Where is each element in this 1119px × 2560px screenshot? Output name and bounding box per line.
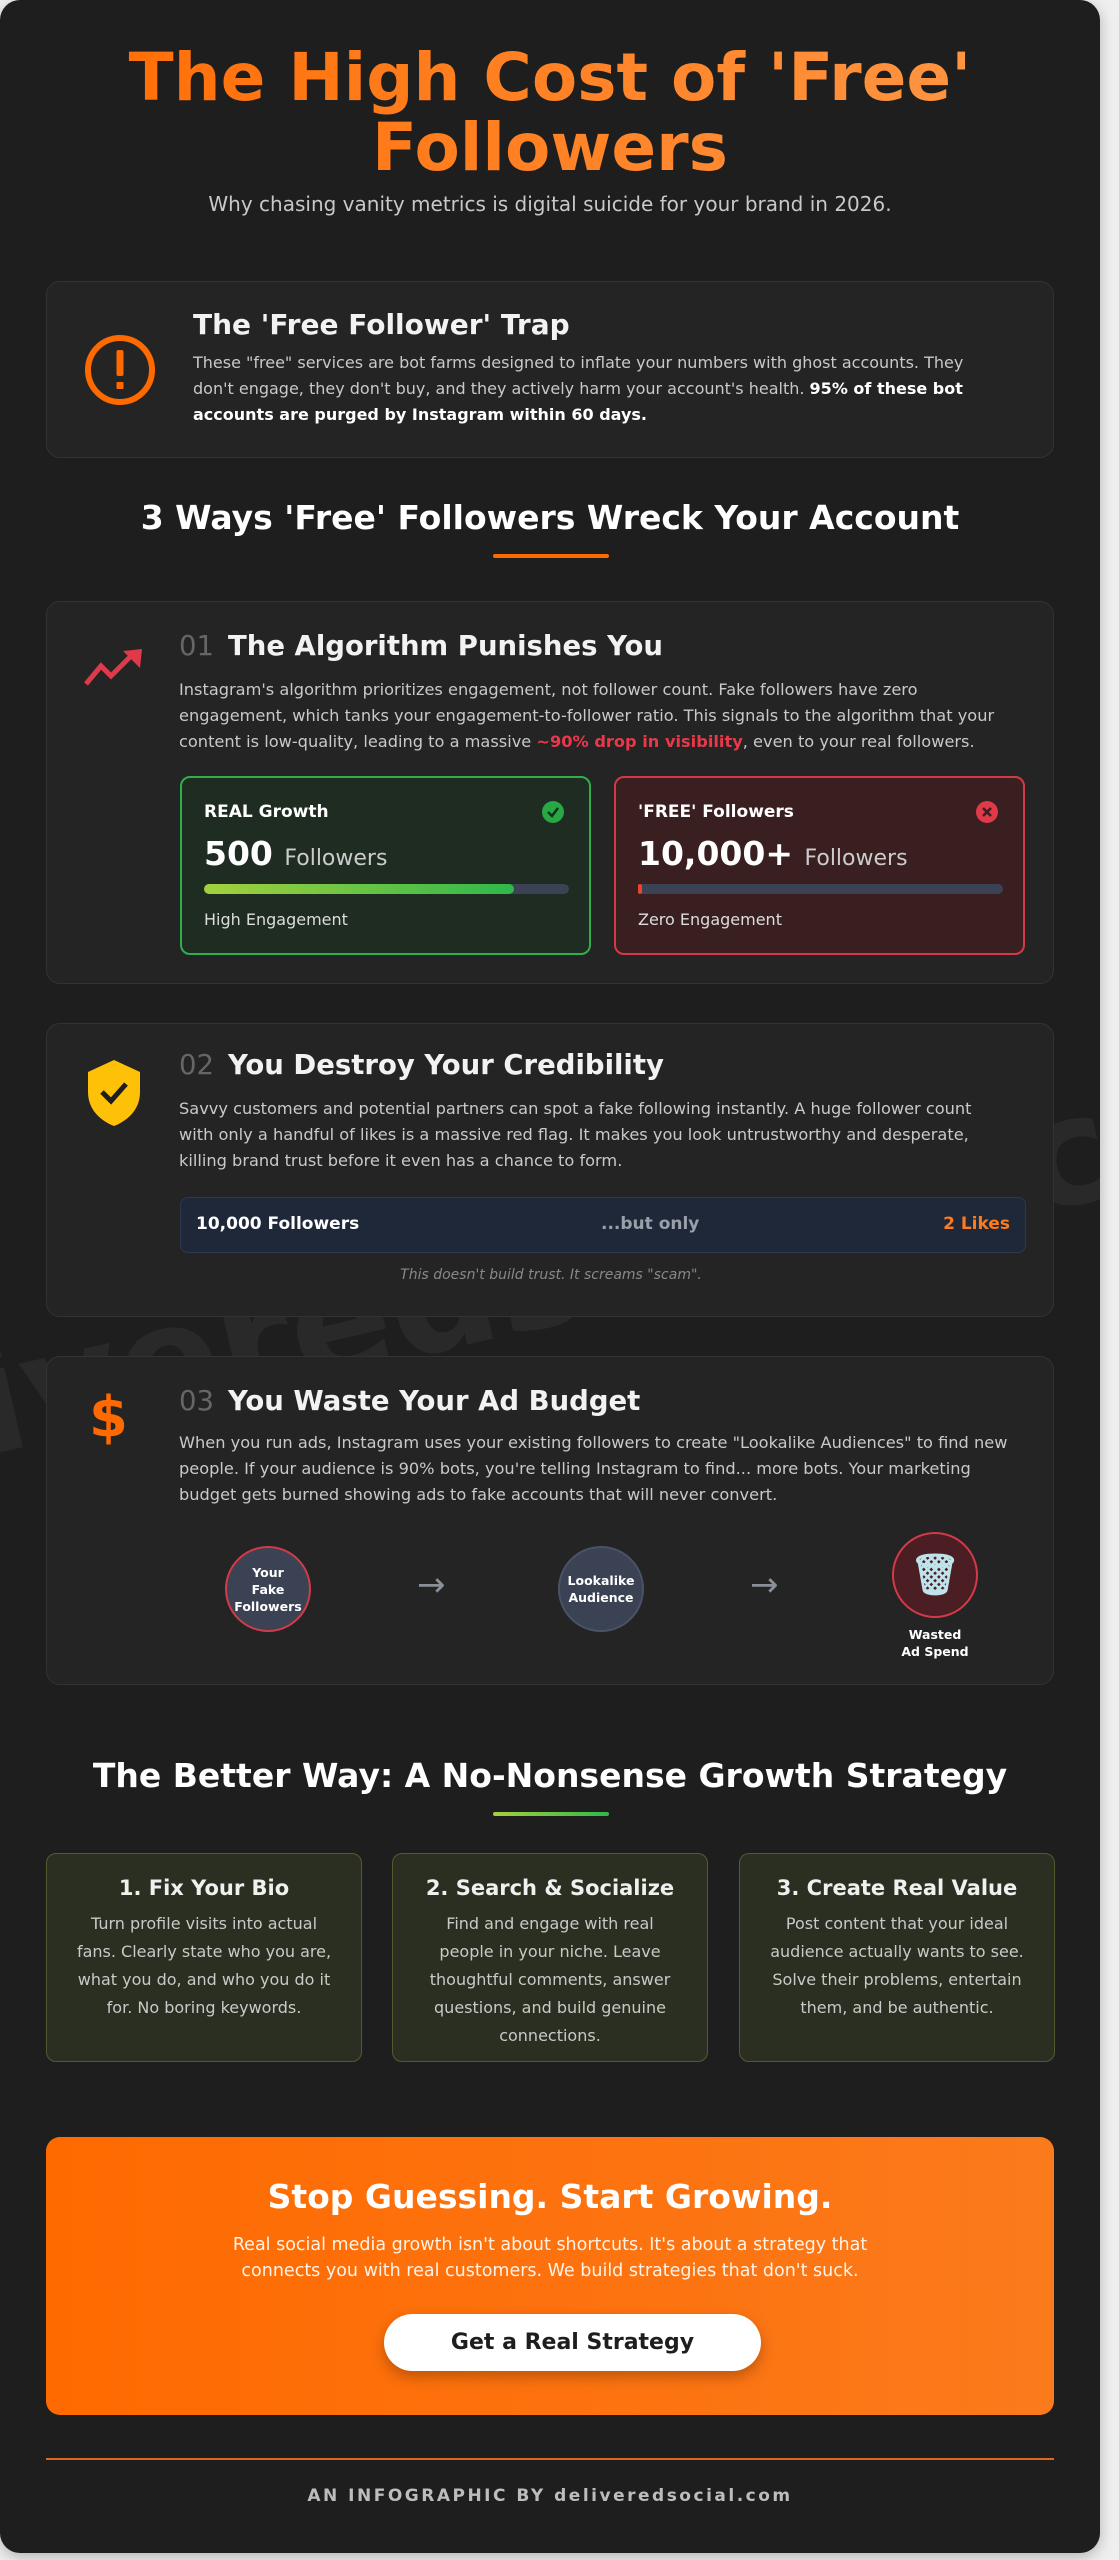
icon: dollar: $	[89, 1385, 128, 1450]
heading: 3 ways: 3 Ways 'Free' Followers Wreck Your Account	[141, 498, 959, 537]
heading: trap: The 'Free Follower' Trap	[193, 308, 570, 341]
card: real value	[739, 1853, 1055, 2062]
card: search socialize	[392, 1853, 708, 2062]
panel: CTA	[46, 2137, 1054, 2415]
icon: warning	[85, 335, 155, 405]
comparison bar: ...but only	[601, 1214, 699, 1234]
footer: AN INFOGRAPHIC BY deliveredsocial.com	[307, 2486, 793, 2506]
comparison bar	[180, 1197, 1026, 1253]
flow diagram: →	[417, 1565, 446, 1605]
panel: ad budget	[46, 1356, 1054, 1685]
subtitle: Why chasing vanity metrics is digital suicide for your brand in 2026.	[208, 192, 892, 216]
icon: trend	[84, 649, 142, 686]
flow diagram: →	[750, 1565, 778, 1605]
flow diagram: Ad Spend	[901, 1644, 969, 1659]
heading: credibility: 02 You Destroy Your Credibility	[179, 1049, 664, 1081]
card: real growth: 500 Followers	[204, 834, 387, 873]
card: search socialize: Find and engage with real people in your niche. Leave thoughtful comments, answer questions, and build genuine connections.	[430, 1914, 670, 2045]
flow diagram: Fake	[252, 1582, 284, 1596]
text: trap: These "free" services are bot farms designed to inflate your numbers with ghost accounts. They don't engage, they don't buy, and they actively harm your account's health. 95% of these bot accounts are purged by Instagram within 60 days.	[193, 353, 963, 424]
heading: ad budget: 03 You Waste Your Ad Budget	[179, 1385, 640, 1417]
icon: check	[542, 801, 564, 823]
flow diagram: Audience	[568, 1590, 634, 1605]
flow diagram: Wasted	[909, 1627, 961, 1642]
card: real growth: REAL Growth	[204, 802, 329, 822]
flow diagram	[225, 1532, 978, 1659]
text: algorithm: Instagram's algorithm prioritizes engagement, not follower count. Fake followers have zero engagement, which tanks your engagement-to-follower ratio. This signals to the algorithm that your content is low-quality, leading to a massive ~90% drop in visibility, even to your real followers.	[179, 680, 994, 751]
card: fix bio: Turn profile visits into actual fans. Clearly state who you are, what you do, and who you do it for. No boring keywords.	[77, 1914, 331, 2017]
flow diagram: Lookalike	[568, 1573, 634, 1588]
text: ad budget: When you run ads, Instagram uses your existing followers to create "Lookalike Audiences" to find new people. If your audience is 90% bots, you're telling Instagram to find... more bots. Your marketing budget gets burned showing ads to fake accounts that will never convert.	[179, 1433, 1007, 1504]
title: Followers	[372, 109, 728, 186]
heading: algorithm: 01 The Algorithm Punishes You	[179, 630, 663, 662]
panel: credibility	[46, 1023, 1054, 1317]
card: search socialize: 2. Search & Socialize	[426, 1876, 674, 1900]
flow diagram: Followers	[234, 1598, 302, 1614]
title: The High Cost of 'Free'	[129, 39, 971, 116]
icon: shield	[88, 1060, 140, 1126]
text: credibility: Savvy customers and potential partners can spot a fake following instantly. A huge follower count with only a handful of likes is a massive red flag. It makes you look untrustworthy and desperate, killing brand trust before it even has a chance to form.	[179, 1099, 972, 1170]
comparison bar: 10,000 Followers	[196, 1214, 359, 1234]
card: fix bio: 1. Fix Your Bio	[119, 1876, 289, 1900]
panel: free follower trap	[46, 281, 1054, 458]
card: free followers: 'FREE' Followers	[638, 802, 794, 822]
card: free followers: Zero Engagement	[638, 910, 782, 929]
CTA button: Get a Real Strategy	[451, 2330, 694, 2355]
icon: cross	[976, 801, 998, 823]
panel: algorithm	[46, 601, 1054, 984]
CTA text: Real social media growth isn't about shortcuts. It's about a strategy that connects you with real customers. We build strategies that don't suck.	[233, 2235, 867, 2281]
card: free followers: 10,000+ Followers	[638, 834, 908, 873]
title	[0, 43, 1100, 183]
CTA heading: Stop Guessing. Start Growing.	[268, 2177, 832, 2216]
card: real value: Post content that your ideal audience actually wants to see. Solve their problems, entertain them, and be authentic.	[770, 1914, 1024, 2017]
card: free followers	[614, 776, 1025, 955]
CTA button	[384, 2314, 761, 2371]
caption: This doesn't build trust. It screams "scam".	[400, 1267, 702, 1283]
card: real value: 3. Create Real Value	[777, 1876, 1017, 1900]
flow diagram: Your	[252, 1564, 284, 1580]
card: real growth: High Engagement	[204, 910, 348, 929]
card: fix bio	[46, 1853, 362, 2062]
heading: better way: The Better Way: A No-Nonsense Growth Strategy	[93, 1756, 1007, 1795]
card: real growth	[180, 776, 591, 955]
comparison bar: 2 Likes	[943, 1214, 1010, 1234]
flow diagram: 🗑	[910, 1552, 960, 1598]
